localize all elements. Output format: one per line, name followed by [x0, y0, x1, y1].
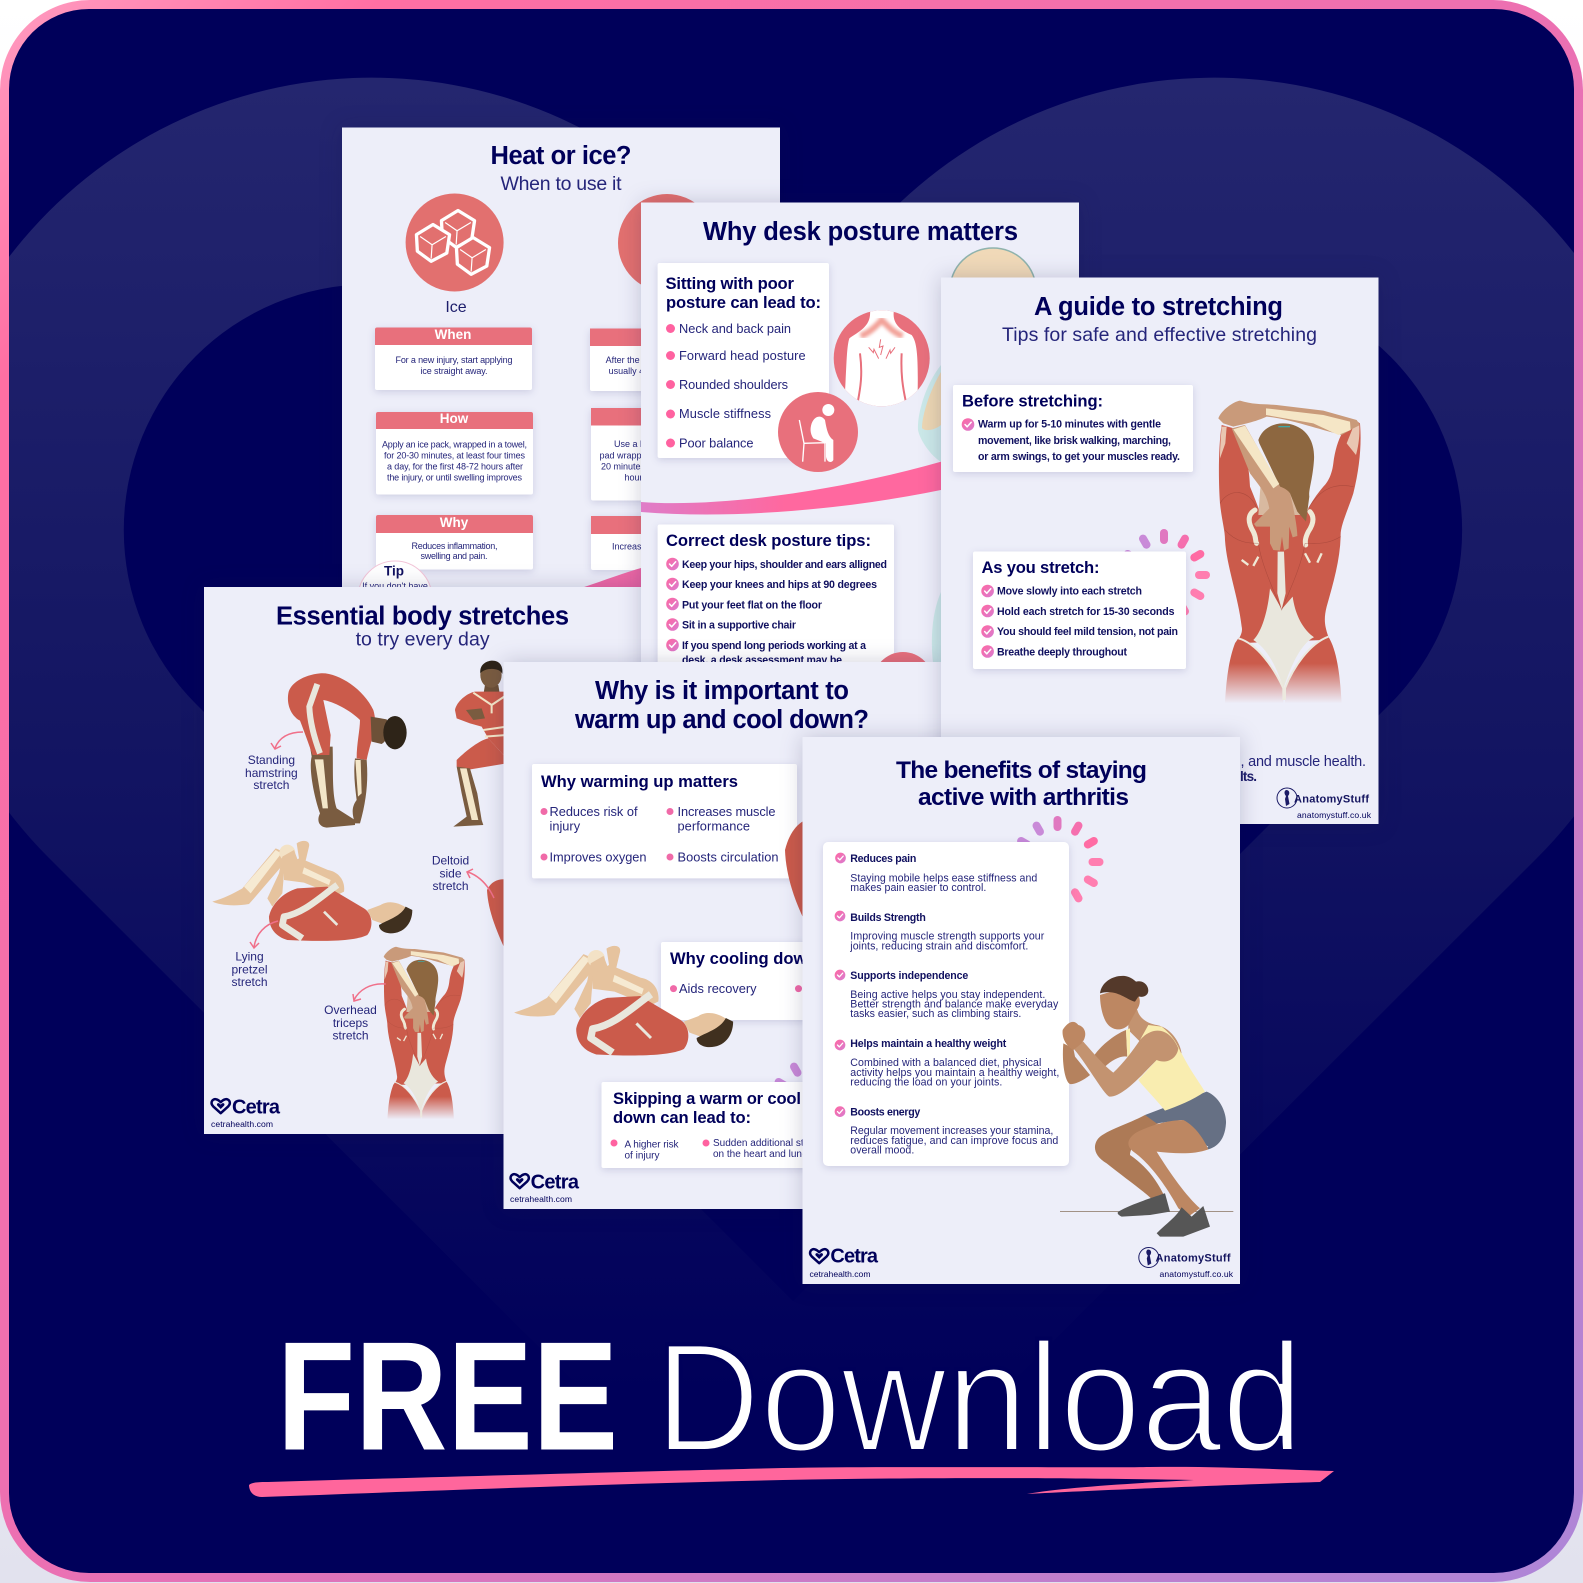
- closing text: lts.: [1240, 769, 1257, 784]
- label: lying pretzel stretch: pretzel: [231, 962, 268, 976]
- box: warming up: Boosts circulation: [678, 850, 778, 864]
- heading: FREE Download: [277, 1310, 1303, 1484]
- box: heat when: usually 48: [609, 366, 649, 376]
- decorative rays: [773, 1057, 861, 1145]
- pink swoosh: [641, 462, 941, 514]
- box: how: a day, for the first 48-72 hours after: [387, 461, 523, 471]
- box: how: the injury, or until swelling improves: [387, 473, 522, 483]
- decorative rays: [1016, 816, 1104, 904]
- label: deltoid side stretch: side: [439, 866, 462, 880]
- title: Why is it important to: [595, 677, 849, 705]
- benefit: builds strength: Builds Strength: [850, 912, 926, 924]
- subtitle: Tips for safe and effective stretching: [1002, 324, 1317, 346]
- callout: tip: Tip: [384, 564, 404, 578]
- label: lying pretzel stretch: stretch: [231, 975, 268, 989]
- logo: Cetra: [510, 1172, 580, 1204]
- box: posture tips: desk, a desk assessment may be: [682, 654, 842, 666]
- box: when: ice straight away.: [420, 366, 488, 376]
- box: why: Why: [440, 515, 469, 530]
- box: how: How: [440, 411, 469, 426]
- label: deltoid side stretch: [432, 856, 468, 890]
- figure: standing hamstring stretch: [288, 673, 407, 828]
- box: warming up: Reduces risk of: [550, 804, 638, 819]
- card: why desk posture matters: [632, 193, 1079, 662]
- figure: lying pretzel stretch: [514, 946, 733, 1055]
- closing text: [1240, 754, 1366, 784]
- logo: Cetra: [810, 1246, 879, 1279]
- closing text: , and muscle health.: [1240, 754, 1366, 770]
- benefit: healthy weight: Combined with a balanced diet, physical: [850, 1057, 1041, 1069]
- box: warming up: Increases muscle: [678, 804, 776, 819]
- box: how: [376, 411, 533, 494]
- figure: deltoid side stretch: [487, 879, 504, 946]
- label: deltoid side stretch: Deltoid: [432, 854, 469, 868]
- icon: ice: [406, 194, 504, 292]
- box: heat when: [587, 328, 641, 396]
- box: cooling down: [661, 942, 861, 1020]
- icon: circle partial: [873, 652, 933, 712]
- card: benefits of staying active: [802, 737, 1240, 1284]
- card: warm up and cool down: [504, 662, 942, 1209]
- box: before stretching: movement, like brisk walking, marching,: [978, 435, 1171, 447]
- arrow: triceps: [353, 984, 386, 1001]
- box: why: [376, 515, 533, 570]
- box: benefits list: [823, 842, 1069, 1166]
- benefit: supports independence: [835, 970, 1059, 1020]
- title: active with arthritis: [918, 784, 1129, 811]
- box: as you stretch: [973, 552, 1186, 669]
- box: warming up: injury: [550, 818, 581, 834]
- benefit: supports independence: Supports independence: [850, 970, 968, 982]
- underline brush stroke: [249, 1467, 1334, 1497]
- callout: tip: [359, 560, 431, 587]
- figure: partial at right: [785, 818, 812, 935]
- box: posture tips: Put your feet flat on the floor: [682, 600, 822, 612]
- box: posture tips: Sit in a supportive chair: [682, 620, 796, 632]
- box: heat how: [588, 407, 641, 506]
- box: before stretching: [953, 385, 1193, 472]
- figure: squat: [453, 661, 507, 827]
- box: how: Apply an ice pack, wrapped in a towel,: [382, 440, 527, 450]
- title: Heat or ice?: [490, 142, 632, 170]
- logo: AnatomyStuff: anatomystuff.co.uk: [1297, 810, 1372, 820]
- title: warm up and cool down?: [574, 706, 869, 734]
- logo: Cetra: cetrahealth.com: [211, 1119, 273, 1129]
- box: warming up: Why warming up matters: [541, 772, 738, 791]
- label: standing hamstring stretch: stretch: [253, 778, 289, 792]
- benefit: healthy weight: activity helps you maintain a healthy weight,: [850, 1067, 1059, 1079]
- subtitle: When to use it: [500, 173, 622, 195]
- box: posture tips: If you spend long periods working at a: [682, 640, 866, 652]
- box: warming up: performance: [678, 818, 750, 834]
- benefit: reduces pain: [835, 853, 1037, 894]
- figure: squatting woman: [1060, 976, 1233, 1237]
- card: essential body stretches: [204, 587, 642, 1134]
- icon: back pain: [834, 310, 930, 407]
- box: heat how: pad wrapped: [600, 450, 652, 460]
- logo: Cetra: cetrahealth.com: [810, 1269, 870, 1279]
- label: lying pretzel stretch: [232, 952, 267, 986]
- box: skipping: Skipping a warm or cool: [613, 1089, 801, 1108]
- box: poor posture effects: Sitting with poor: [666, 274, 795, 293]
- box: heat why: [588, 515, 641, 575]
- figure: head top: [951, 247, 1035, 278]
- box: how: for 20-30 minutes, at least four times: [384, 451, 526, 461]
- benefit: supports independence: Better strength and balance make everyday: [850, 998, 1059, 1010]
- box: why: swelling and pain.: [420, 551, 488, 561]
- benefit: builds strength: joints, reducing strain and discomfort.: [849, 940, 1028, 952]
- box: why: Reduces inflammation,: [412, 541, 498, 551]
- title: Why desk posture matters: [703, 218, 1018, 246]
- box: poor posture effects: posture can lead to:: [666, 293, 821, 312]
- label: deltoid side stretch: stretch: [432, 879, 469, 893]
- title: Essential body stretches: [276, 602, 569, 630]
- box: skipping: [602, 1082, 862, 1168]
- subtitle: to try every day: [356, 628, 490, 650]
- box: when: For a new injury, start applying: [396, 355, 512, 365]
- logo: AnatomyStuff: AnatomyStuff: [1156, 1253, 1231, 1265]
- benefit: healthy weight: Helps maintain a healthy weight: [850, 1038, 1007, 1050]
- figure: overhead triceps back view: [1218, 401, 1361, 703]
- box: heat why: Increases: [612, 542, 652, 552]
- benefit: boosts energy: reduces fatigue, and can improve focus and: [850, 1135, 1058, 1147]
- label: overhead triceps stretch: triceps: [333, 1016, 368, 1030]
- label: lying pretzel stretch: Lying: [235, 950, 264, 964]
- logo: Cetra: Cetra: [232, 1097, 281, 1119]
- benefit: builds strength: Improving muscle strength supports your: [850, 931, 1045, 943]
- box: warming up: [532, 764, 797, 878]
- card: heat or ice: [342, 128, 780, 587]
- benefit: boosts energy: [835, 1106, 1058, 1156]
- label: overhead triceps stretch: Overhead: [324, 1003, 377, 1017]
- icon: heat: [618, 194, 694, 284]
- box: heat how: Use a heat: [614, 439, 658, 449]
- icon: slouched sitting: [778, 392, 858, 472]
- heading: FREE Download: Download: [655, 1311, 1303, 1484]
- logo: Cetra: cetrahealth.com: [510, 1194, 572, 1204]
- heading: FREE Download: FREE: [277, 1310, 618, 1482]
- label: overhead triceps stretch: [324, 1006, 376, 1040]
- box: heat how: hours: [624, 472, 648, 482]
- logo: AnatomyStuff: anatomystuff.co.uk: [1160, 1269, 1234, 1279]
- title: [896, 757, 1147, 811]
- box: skipping: Sudden additional strain: [713, 1138, 820, 1149]
- benefit: boosts energy: Regular movement increases your stamina,: [850, 1125, 1053, 1137]
- logo: AnatomyStuff: [1139, 1248, 1234, 1279]
- box: poor posture effects: Rounded shoulders: [679, 377, 788, 392]
- box: cooling down: Aids recovery: [679, 981, 757, 996]
- box: cooling down: Why cooling down: [670, 949, 817, 968]
- box: before stretching: or arm swings, to get your muscles ready.: [978, 451, 1180, 463]
- benefit: reduces pain: Staying mobile helps ease stiffness and: [850, 872, 1037, 884]
- box: poor posture effects: Poor balance: [679, 436, 754, 450]
- benefit: boosts energy: Boosts energy: [850, 1107, 920, 1119]
- label: standing hamstring stretch: Standing: [248, 753, 295, 767]
- arrow: hamstring: [271, 732, 303, 749]
- box: when: [375, 327, 532, 390]
- label: overhead triceps stretch: stretch: [332, 1029, 369, 1043]
- box: posture tips: [658, 524, 894, 684]
- box: poor posture effects: Muscle stiffness: [679, 406, 771, 421]
- benefit: boosts energy: overall mood.: [850, 1144, 914, 1156]
- box: posture tips: Keep your hips, shoulder and ears alligned: [682, 559, 887, 571]
- benefit: healthy weight: reducing the load on your joints.: [850, 1076, 1002, 1088]
- logo: AnatomyStuff: AnatomyStuff: [1294, 793, 1369, 805]
- card: guide to stretching: [941, 278, 1378, 824]
- box: before stretching: Warm up for 5-10 minutes with gentle: [978, 418, 1161, 430]
- benefit: supports independence: Being active helps you stay independent.: [850, 989, 1045, 1001]
- box: as you stretch: Move slowly into each stretch: [997, 585, 1142, 597]
- box: as you stretch: You should feel mild tension, not pain: [997, 626, 1178, 638]
- decorative rays: [1122, 529, 1210, 617]
- pink swoosh: [584, 568, 641, 587]
- logo: Cetra: Cetra: [531, 1172, 580, 1194]
- box: posture tips: Keep your knees and hips at 90 degrees: [682, 579, 877, 591]
- figure: posture side: [918, 365, 941, 663]
- logo: Cetra: Cetra: [830, 1246, 879, 1268]
- arrow: deltoid: [467, 869, 494, 898]
- arrow: pretzel: [250, 921, 278, 948]
- box: heat when: After the: [606, 355, 640, 365]
- box: before stretching: Before stretching:: [962, 392, 1103, 411]
- box: skipping: on the heart and lungs: [713, 1149, 813, 1160]
- box: skipping: of injury: [624, 1150, 660, 1162]
- box: poor posture effects: Forward head posture: [679, 348, 806, 363]
- title: The benefits of staying: [896, 757, 1147, 784]
- benefit: healthy weight: [835, 1038, 1059, 1088]
- box: warming up: Improves oxygen: [550, 850, 646, 864]
- figure: overhead triceps stretch: [384, 947, 465, 1119]
- title: [574, 677, 869, 734]
- box: poor posture effects: Neck and back pain: [679, 321, 791, 336]
- box: heat how: 20 minutes: [601, 462, 646, 472]
- callout: tip: If you don't have: [362, 581, 428, 591]
- box: as you stretch: As you stretch:: [982, 558, 1100, 577]
- box: as you stretch: Breathe deeply throughout: [997, 647, 1127, 659]
- box: when: When: [435, 327, 471, 342]
- box: skipping: A higher risk: [624, 1139, 680, 1150]
- background hearts: [9, 78, 1574, 1131]
- box: posture tips: Correct desk posture tips:: [666, 531, 871, 550]
- benefit: supports independence: tasks easier, such as climbing stairs.: [850, 1008, 1021, 1020]
- label: standing hamstring stretch: [246, 756, 297, 789]
- label: ice: Ice: [445, 299, 467, 316]
- box: poor posture effects: [658, 263, 829, 458]
- box: as you stretch: Hold each stretch for 15-30 seconds: [997, 606, 1175, 618]
- box: skipping: down can lead to:: [613, 1108, 751, 1127]
- label: standing hamstring stretch: hamstring: [245, 766, 298, 780]
- benefit: reduces pain: Reduces pain: [850, 853, 916, 865]
- benefit: builds strength: [835, 911, 1045, 952]
- figure: lying pretzel stretch: [212, 841, 412, 941]
- logo: AnatomyStuff: [1277, 788, 1372, 820]
- title: A guide to stretching: [1034, 293, 1283, 321]
- benefit: reduces pain: makes pain easier to control.: [850, 882, 986, 894]
- logo: Cetra: [211, 1097, 281, 1129]
